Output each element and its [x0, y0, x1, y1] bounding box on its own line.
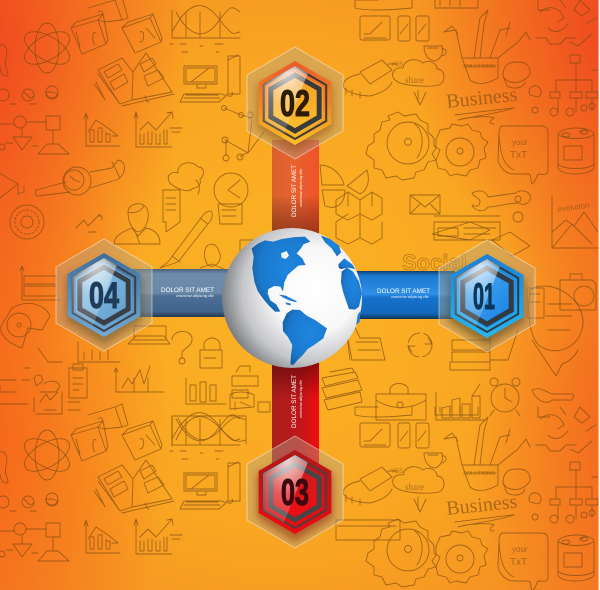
- doodle pattern background: Business: [445, 84, 518, 113]
- horizontal bar left: steel blue: [130, 269, 240, 317]
- label: right bar: consectetur adipiscing elite: [391, 295, 429, 299]
- doodle pattern background: share: [405, 75, 424, 85]
- label: right bar: [377, 288, 430, 299]
- repeated doodles lower section: [0, 404, 598, 590]
- label: bottom bar: [291, 375, 303, 428]
- doodle pattern background: share: [405, 482, 424, 492]
- hexagon badge 01: [439, 240, 535, 352]
- label: left bar: DOLOR SIT AMET: [161, 287, 214, 294]
- label: top bar: [291, 165, 303, 217]
- label: bottom bar: DOLOR SIT AMET: [291, 375, 298, 428]
- horizontal bar right: blue: [345, 271, 455, 319]
- label: left bar: consectetur adipiscing elite: [176, 294, 214, 298]
- label: top bar: DOLOR SIT AMET: [291, 165, 298, 217]
- label: right bar: DOLOR SIT AMET: [377, 288, 430, 295]
- doodle pattern background: TxT: [510, 557, 527, 568]
- doodle pattern background: YES: [391, 469, 403, 475]
- doodle pattern background: YES: [391, 62, 403, 68]
- doodle pattern background: SOLUTIONS: [463, 64, 495, 70]
- doodle pattern background: Business: [445, 491, 518, 520]
- globe: [222, 228, 362, 368]
- hexagon badge 04: [56, 239, 152, 351]
- label: bottom bar: consectetur adipiscing elite: [299, 380, 303, 418]
- hexagon badge 02: 02: [280, 83, 310, 124]
- label: left bar: [161, 287, 214, 298]
- hexagon badge 03: 03: [281, 472, 309, 513]
- hexagon badge 01: 01: [473, 276, 495, 317]
- doodle pattern background: your: [512, 138, 528, 147]
- right edge strip: [598, 0, 600, 590]
- doodle pattern background: evolution: [557, 201, 590, 214]
- doodle pattern background: SOLUTIONS: [463, 471, 495, 477]
- hexagon badge 04: 04: [89, 275, 119, 316]
- hexagon badge 02: [247, 47, 343, 159]
- hexagon badge 03: [247, 436, 343, 548]
- doodle pattern background: TxT: [510, 150, 527, 161]
- vertical bar bottom: red: [272, 355, 319, 465]
- vertical bar top: orange: [272, 140, 319, 240]
- doodle pattern background: Social: [402, 250, 467, 275]
- label: top bar: consectetur adipiscing elite: [299, 169, 303, 207]
- doodle pattern background: your: [512, 545, 528, 554]
